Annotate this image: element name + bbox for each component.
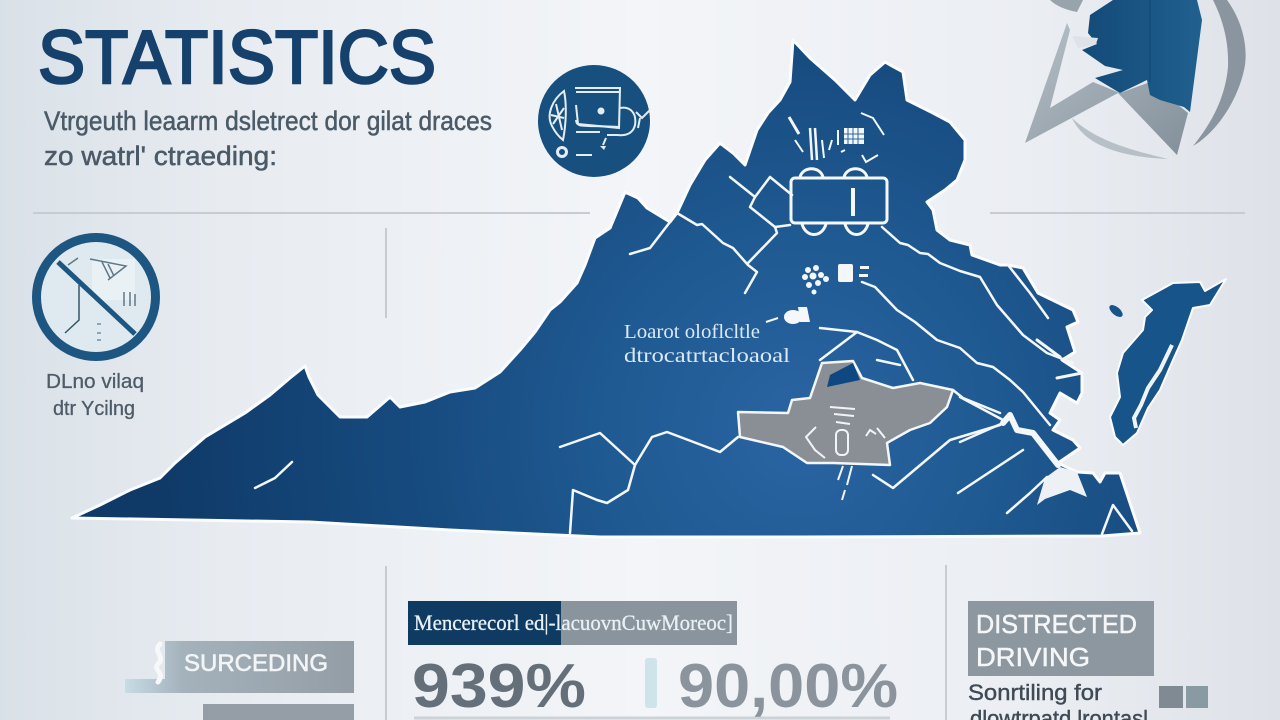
icon label: dtr Ycilng (53, 398, 135, 420)
highlighted grey county (738, 361, 953, 500)
map caption: dtrocatrtacloaoal (624, 345, 791, 367)
intro text: Vtrgeuth leaarm dsletrect dor gilat draces (44, 106, 492, 136)
icon: no-phone prohibition circle (36, 238, 156, 356)
icon: figure (156, 644, 161, 682)
icon: circle with device (538, 65, 650, 177)
small island (1107, 303, 1125, 319)
panel: surceding: SURCEDING (184, 650, 328, 677)
intro text (44, 106, 492, 171)
map caption (624, 321, 791, 367)
icon: two squares (1159, 686, 1208, 708)
distracted driving text: Sonrtiling for (968, 680, 1102, 705)
stat: 939%: 939% (412, 652, 586, 720)
icon: pin blob (766, 307, 810, 324)
panel: distracted driving (968, 601, 1154, 676)
icon: dots cluster (802, 264, 869, 294)
panel: surceding (125, 641, 354, 720)
intro text: zo watrl' ctraeding: (44, 141, 277, 171)
icon: pale bar (645, 658, 657, 708)
icon: top-right logo (1025, 0, 1246, 159)
title: STATISTICS (38, 15, 436, 99)
distracted driving text (968, 680, 1148, 720)
rivers (255, 177, 1132, 534)
stat: 90,00%: 90,00% (678, 652, 898, 720)
bay wedge (1037, 467, 1087, 505)
panel: statistics band (408, 601, 737, 645)
eastern shore (1110, 279, 1226, 445)
panel: distracted driving: DRIVING (976, 642, 1090, 672)
icon: car (791, 169, 887, 234)
icon label: DLno vilaq (46, 371, 144, 393)
map caption: Loarot oloflcltle (624, 321, 760, 343)
panel: distracted driving: DISTRECTED (976, 609, 1137, 639)
map of Virginia (72, 40, 1226, 537)
icon: distraction marks (789, 113, 884, 162)
panel: statistics band: Mencerecorl ed|-lacuovnCuwMoreoc] (414, 610, 733, 635)
icon label (46, 371, 144, 420)
mainland (72, 40, 1140, 537)
